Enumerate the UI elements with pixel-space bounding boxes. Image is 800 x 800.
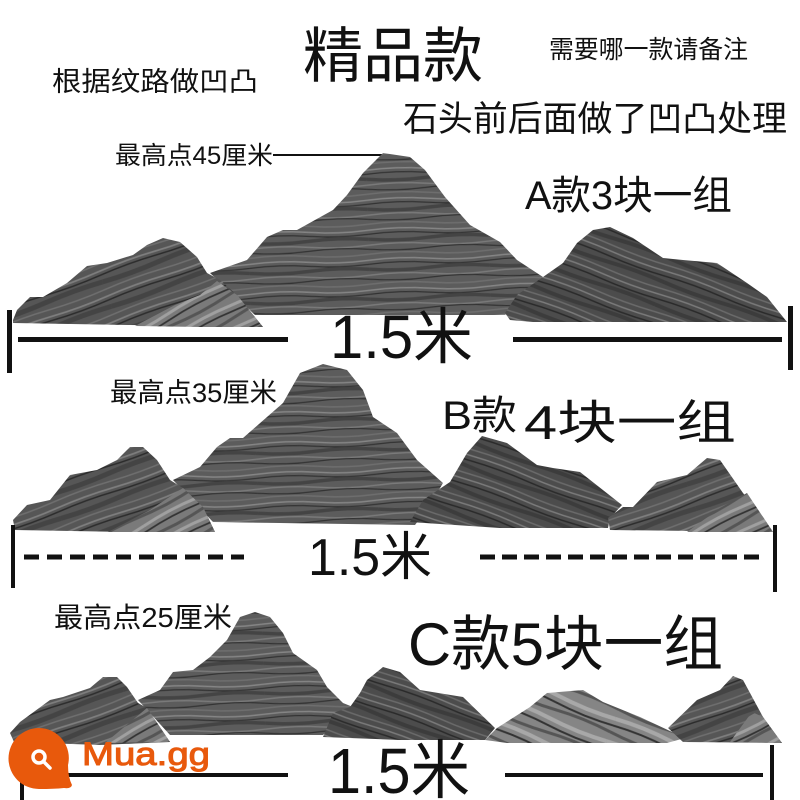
dimension lines A	[7, 306, 793, 373]
width label A: 1.5米	[330, 303, 473, 371]
watermark logo	[8, 728, 210, 789]
panel: model B	[11, 364, 777, 592]
model C heading: C款5块一组	[408, 611, 723, 678]
panel: model A	[7, 142, 793, 373]
dimension lines B	[11, 525, 777, 592]
note: front and back relief: 石头前后面做了凹凸处理	[403, 100, 787, 139]
watermark text: Mua.gg	[82, 736, 210, 772]
note: please specify model: 需要哪一款请备注	[549, 36, 748, 64]
height label B: 最高点35厘米	[110, 378, 277, 408]
height label C: 最高点25厘米	[54, 602, 232, 633]
model B count: 4块一组	[524, 396, 736, 449]
height leader line	[273, 154, 385, 156]
title: 精品款	[303, 23, 483, 90]
panel: model C	[10, 602, 782, 800]
width label B: 1.5米	[308, 529, 432, 587]
model A heading: A款3块一组	[525, 174, 732, 218]
dimension lines C	[20, 745, 774, 800]
height label A: 最高点45厘米	[115, 142, 273, 170]
rocks group C	[10, 612, 782, 745]
note: relief follows the texture: 根据纹路做凹凸	[52, 67, 258, 97]
rocks group A	[13, 153, 787, 327]
icon: orange search bubble	[8, 728, 72, 789]
model B heading: B款	[442, 394, 517, 438]
rocks group B	[13, 364, 773, 532]
